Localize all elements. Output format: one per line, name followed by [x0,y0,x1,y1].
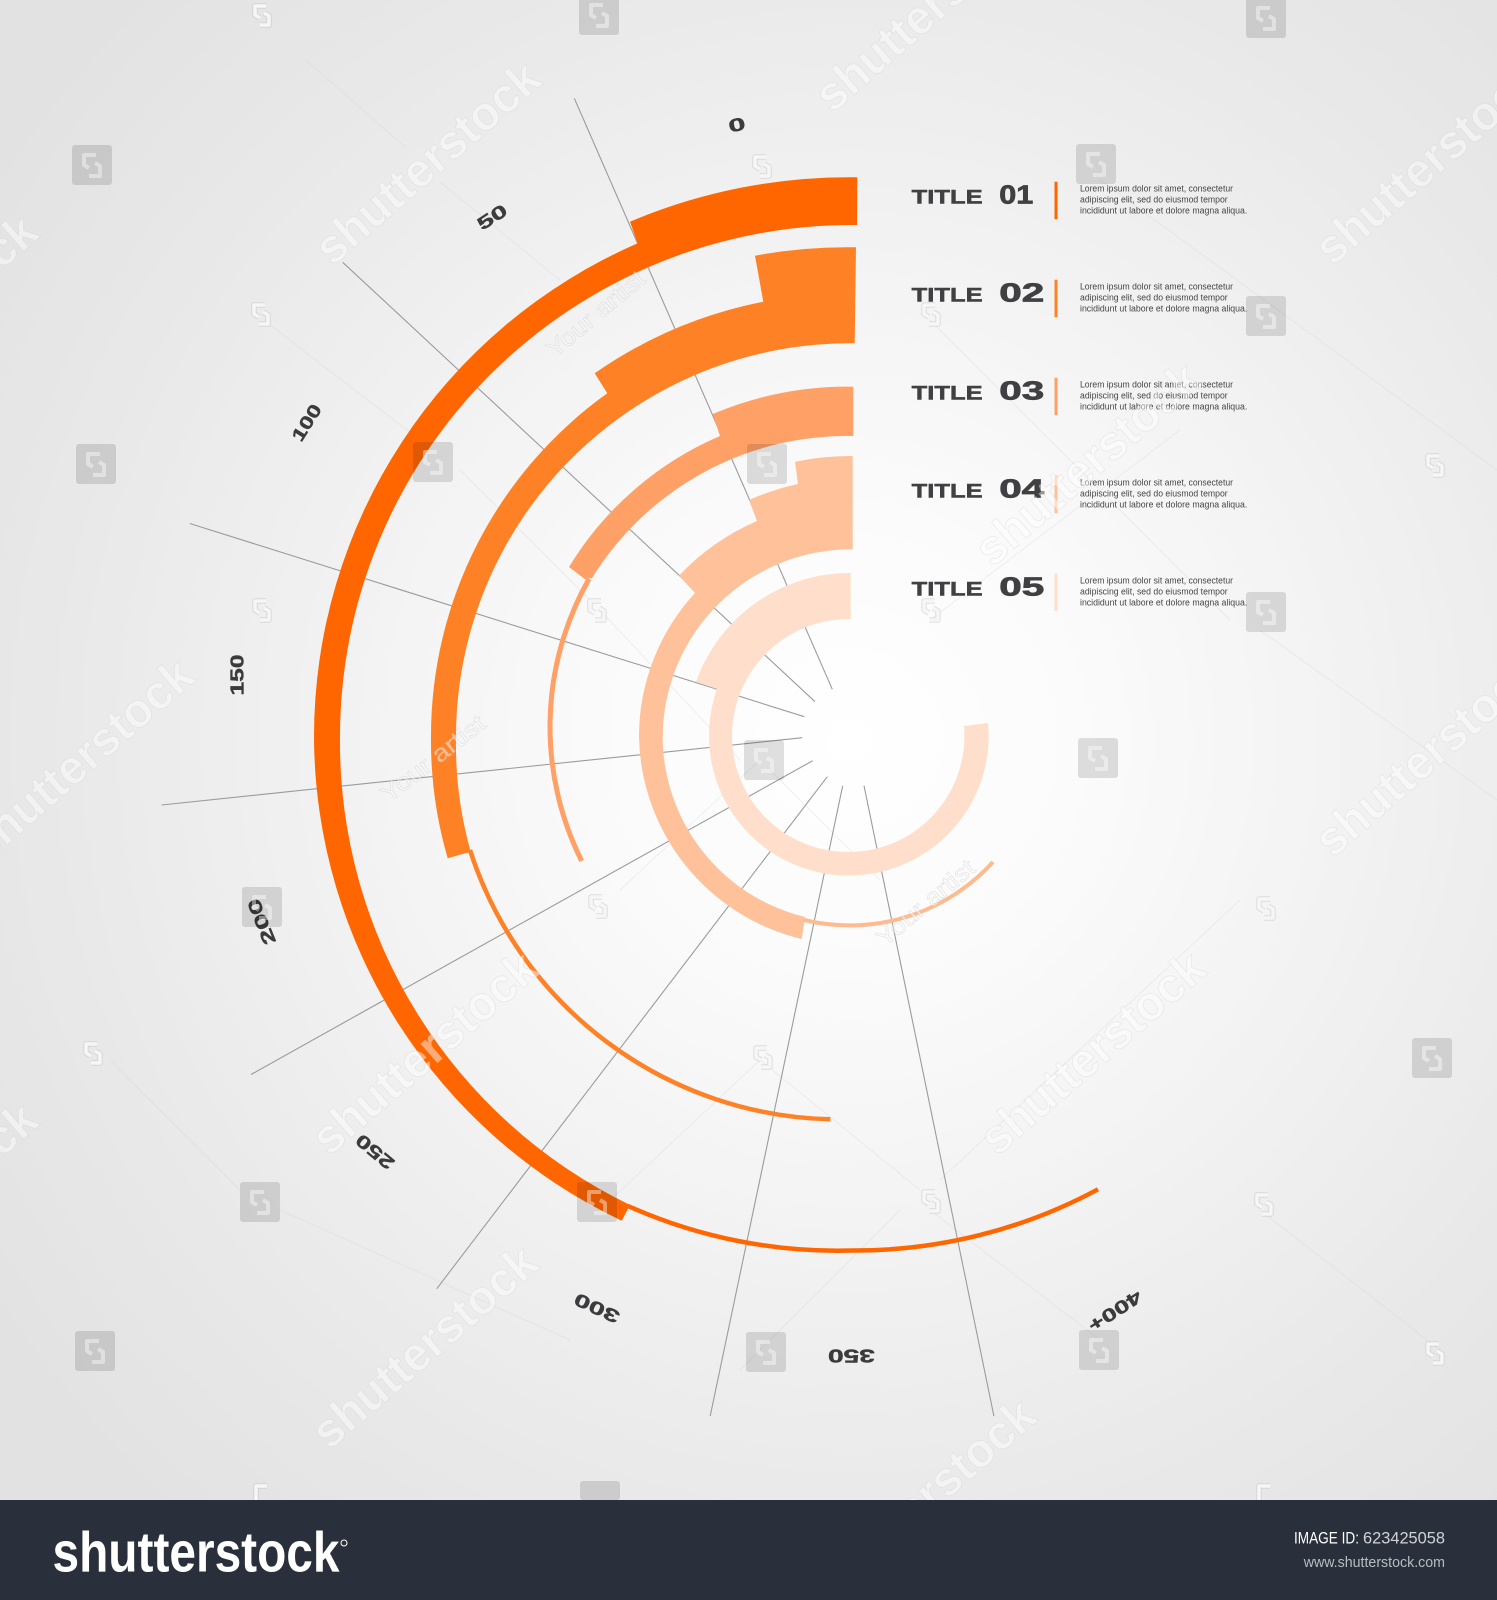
axis scale labels: 50 [473,200,511,234]
image id: 623425058 [1363,1529,1445,1547]
axis scale labels: 400+ [1084,1286,1146,1336]
shutterstock text watermarks: Your artist [376,710,491,808]
band 01 [314,177,1098,1251]
legend row 03: Lorem ipsum dolor sit amet, consectetur [1080,380,1233,390]
legend row 05: TITLE [912,578,983,600]
footer logo: shutterstock [52,1521,340,1585]
legend row 02: TITLE [912,284,983,306]
legend row 05: Lorem ipsum dolor sit amet, consectetur [1080,576,1233,586]
image id: IMAGE ID: [1294,1529,1359,1547]
footer bar [0,1500,1497,1600]
legend row 04: 04 [999,476,1046,504]
legend row 02: incididunt ut labore et dolore magna aliqua. [1080,304,1247,314]
legend row 01: incididunt ut labore et dolore magna aliqua. [1080,206,1247,216]
legend row 01: 01 [999,182,1033,210]
legend row 04: Lorem ipsum dolor sit amet, consectetur [1080,478,1233,488]
legend row 05: incididunt ut labore et dolore magna aliqua. [1080,598,1247,608]
axis scale labels: 100 [288,400,326,445]
radial bar chart [314,177,1098,1251]
website: www.shutterstock.com [1303,1554,1445,1571]
axis scale labels: 150 [228,654,248,696]
legend row 02: 02 [999,280,1044,308]
shutterstock text watermarks: shutterstock [305,51,551,275]
legend row 03: incididunt ut labore et dolore magna aliqua. [1080,402,1247,412]
legend row 03 [912,378,1247,415]
legend row 01: TITLE [912,186,983,208]
shutterstock text watermarks: shutterstock [302,1235,548,1459]
axis scale labels: 0 [727,113,747,137]
axis scale labels [228,113,1146,1366]
legend row 03: adipiscing elit, sed do eiusmod tempor [1080,390,1228,400]
shutterstock text watermarks: Your artist [872,854,981,952]
legend row 04: incididunt ut labore et dolore magna aliqua. [1080,500,1247,510]
axis scale labels: 200 [243,896,280,948]
legend row 05: 05 [999,574,1044,602]
axis scale labels: 250 [352,1130,398,1174]
legend row 05: adipiscing elit, sed do eiusmod tempor [1080,586,1228,596]
legend row 04: adipiscing elit, sed do eiusmod tempor [1080,488,1228,498]
axis scale labels: 300 [571,1289,623,1327]
legend row 03: 03 [999,378,1044,406]
shutterstock text watermarks: shutterstock [302,941,548,1165]
band 05 [696,573,989,876]
legend row 02 [912,280,1247,317]
band 02 [431,247,856,1119]
band 04 [639,456,993,939]
legend row 01: Lorem ipsum dolor sit amet, consectetur [1080,184,1233,194]
image id [1294,1529,1445,1547]
shutterstock text watermarks: shutterstock [965,352,1211,576]
axis scale labels: 350 [828,1346,875,1366]
shutterstock text watermarks: Your artist [542,265,651,363]
legend row 01: adipiscing elit, sed do eiusmod tempor [1080,194,1228,204]
legend row 01 [912,182,1247,219]
legend row 04 [912,476,1247,513]
legend row 02: Lorem ipsum dolor sit amet, consectetur [1080,282,1233,292]
legend row 05 [912,574,1247,611]
legend row 04: TITLE [912,480,983,502]
legend row 03: TITLE [912,382,983,404]
legend row 02: adipiscing elit, sed do eiusmod tempor [1080,292,1228,302]
shutterstock text watermarks: shutterstock [970,941,1216,1165]
band 03 [550,387,853,861]
radial grid lines [162,98,994,1416]
